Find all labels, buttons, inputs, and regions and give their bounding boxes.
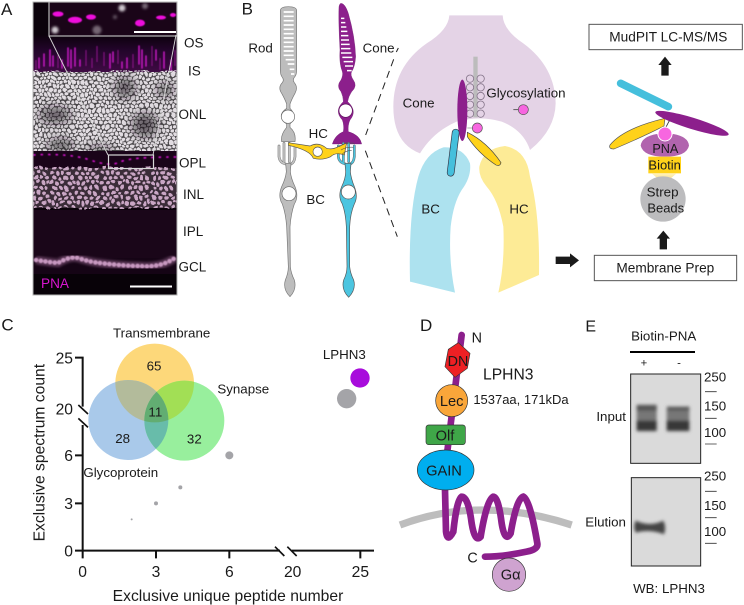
panel label D: D: [420, 316, 432, 335]
molecular weight markers: 100: [704, 524, 726, 539]
box: membrane prep: [594, 255, 737, 281]
layer labels: IS: [188, 64, 201, 78]
LPHN3 title: LPHN3: [483, 366, 534, 383]
biotin: Biotin: [648, 157, 681, 172]
panel D: LPHN3 domain structure: [400, 316, 572, 591]
strep beads: Strep: [647, 185, 679, 200]
Venn diagram: 32: [187, 431, 202, 446]
Venn labels: Synapse: [217, 381, 269, 396]
Venn diagram: 28: [115, 431, 130, 446]
zoom lines: [49, 35, 176, 155]
terminus labels: [467, 330, 482, 567]
image frame: [33, 2, 177, 295]
y tick labels: 6: [64, 448, 73, 465]
box: MudPIT: MudPIT LC-MS/MS: [609, 30, 727, 45]
panel label A: A: [1, 0, 13, 19]
molecular weight markers: [704, 369, 726, 539]
PNA label: PNA: [41, 276, 70, 291]
dashed zoom lines: [365, 59, 397, 237]
ganglion cell layer: [36, 258, 175, 266]
inset: [49, 2, 177, 36]
Biotin-PNA header: -: [677, 358, 681, 370]
layer labels: ONL: [178, 107, 207, 122]
yellow protein: [467, 132, 501, 165]
blot labels: [585, 409, 626, 530]
LPHN3 label: LPHN3: [323, 347, 366, 362]
Lec domain: Lec: [440, 394, 463, 410]
Biotin-PNA header: [630, 329, 696, 370]
cell labels: HC: [309, 126, 328, 141]
cell labels: [248, 40, 395, 207]
layer labels: OPL: [179, 156, 207, 170]
rod bipolar cell: [279, 143, 297, 297]
cell labels: Cone: [363, 40, 395, 55]
cone terminal: [393, 15, 556, 153]
y tick labels: 25: [56, 350, 73, 367]
glycosylation legend: [486, 86, 566, 115]
cone bipolar cell: [338, 143, 356, 297]
panel label E: E: [585, 319, 596, 336]
strep beads: [640, 176, 686, 222]
cone label: Cone: [403, 95, 435, 110]
Olf domain: [426, 425, 465, 445]
PNA lectin: [641, 121, 689, 157]
LPHN3 point: [350, 368, 370, 388]
horizontal cell: [288, 143, 354, 159]
panel C: scatter plot with Venn: [1, 316, 374, 605]
x tick labels: 6: [225, 564, 234, 581]
elution blot: [631, 478, 701, 566]
terminus labels: N: [472, 330, 482, 346]
x tick labels: [78, 564, 369, 581]
purple bound protein: [654, 107, 730, 140]
Biotin-PNA header: Biotin-PNA: [631, 329, 696, 344]
panel B: cell schematic: [242, 0, 398, 297]
layer labels: OS: [184, 36, 204, 50]
cone cell: [332, 3, 362, 144]
layer labels: IPL: [183, 224, 204, 239]
yellow bound protein: [610, 118, 665, 149]
Venn diagram: 65: [147, 358, 161, 373]
glycosylation stick: [466, 57, 484, 117]
biotin: [648, 157, 681, 184]
panel B: synapse detail: [393, 15, 742, 293]
arrow: right: [556, 253, 579, 267]
arrow: up to MudPIT: [658, 57, 672, 76]
layer labels: [178, 36, 207, 274]
strep beads: Beads: [647, 201, 685, 216]
blot labels: Elution: [585, 515, 626, 530]
cyan bound protein: [621, 83, 668, 107]
size label: 1537aa, 171kDa: [473, 392, 569, 407]
protein backbone: [445, 335, 537, 557]
cone comma dash: [396, 48, 398, 52]
DN domain: DN: [448, 354, 468, 370]
panel E: western blot: [585, 319, 726, 596]
molecular weight markers: 100: [704, 425, 726, 440]
Venn labels: Glycoprotein: [83, 465, 158, 480]
layer labels: GCL: [178, 260, 207, 274]
Venn labels: [83, 326, 269, 480]
GAIN domain: [417, 450, 474, 490]
Venn diagram: 11: [148, 404, 162, 419]
G alpha: [492, 558, 526, 591]
terminus labels: C: [467, 551, 478, 567]
molecular weight markers: 150: [704, 399, 726, 414]
WB label: WB: LPHN3: [633, 581, 705, 596]
membrane: [400, 510, 572, 525]
G alpha: Gα: [501, 568, 521, 584]
Olf domain: Olf: [436, 429, 455, 445]
panel label C: C: [1, 316, 14, 335]
y tick labels: 0: [64, 543, 73, 560]
PNA bound circle: [467, 123, 482, 133]
cyan protein: [451, 133, 456, 173]
marker ticks: [705, 392, 717, 543]
Venn labels: Transmembrane: [113, 326, 210, 341]
molecular weight markers: 250: [704, 469, 726, 484]
arrow: up from membrane prep: [657, 231, 670, 249]
molecular weight markers: 250: [704, 369, 726, 384]
bipolar dendrite: [410, 147, 470, 293]
glycosylation legend: Glycosylation: [486, 86, 566, 101]
HC label: HC: [509, 202, 529, 217]
purple receptor: [457, 80, 467, 141]
x tick labels: 3: [152, 564, 161, 581]
Venn diagram: [88, 344, 224, 461]
box: MudPIT: [589, 24, 742, 50]
BC label: BC: [421, 202, 440, 217]
x tick labels: 0: [78, 564, 87, 581]
inset scale bar: [134, 31, 176, 33]
blot labels: Input: [596, 409, 626, 424]
micrograph image: [33, 2, 177, 295]
y tick labels: [56, 350, 73, 560]
DN domain: [445, 343, 470, 377]
y tick labels: 20: [56, 401, 73, 418]
GAIN domain: GAIN: [426, 463, 462, 479]
box: membrane prep: Membrane Prep: [616, 261, 715, 276]
y tick labels: 3: [64, 496, 73, 513]
Biotin-PNA header: +: [641, 358, 648, 370]
scale bar: [130, 286, 172, 288]
PNA lectin: PNA: [652, 142, 679, 156]
zoom box: [108, 155, 154, 168]
axes: [75, 358, 374, 558]
x tick labels: 20: [284, 564, 302, 581]
rod cell: [280, 7, 297, 142]
data points: [131, 389, 356, 520]
layer labels: INL: [183, 187, 204, 202]
molecular weight markers: 150: [704, 498, 726, 513]
y axis title: Exclusive spectrum count: [32, 363, 49, 541]
Lec domain: [436, 385, 468, 417]
horizontal dendrite: [479, 146, 539, 293]
cell labels: BC: [306, 192, 325, 207]
x axis title: Exclusive unique peptide number: [113, 588, 343, 605]
cell labels: Rod: [248, 40, 273, 55]
x tick labels: 25: [352, 564, 369, 581]
input blot: [631, 374, 701, 463]
panel A: retina micrograph: [1, 0, 207, 295]
